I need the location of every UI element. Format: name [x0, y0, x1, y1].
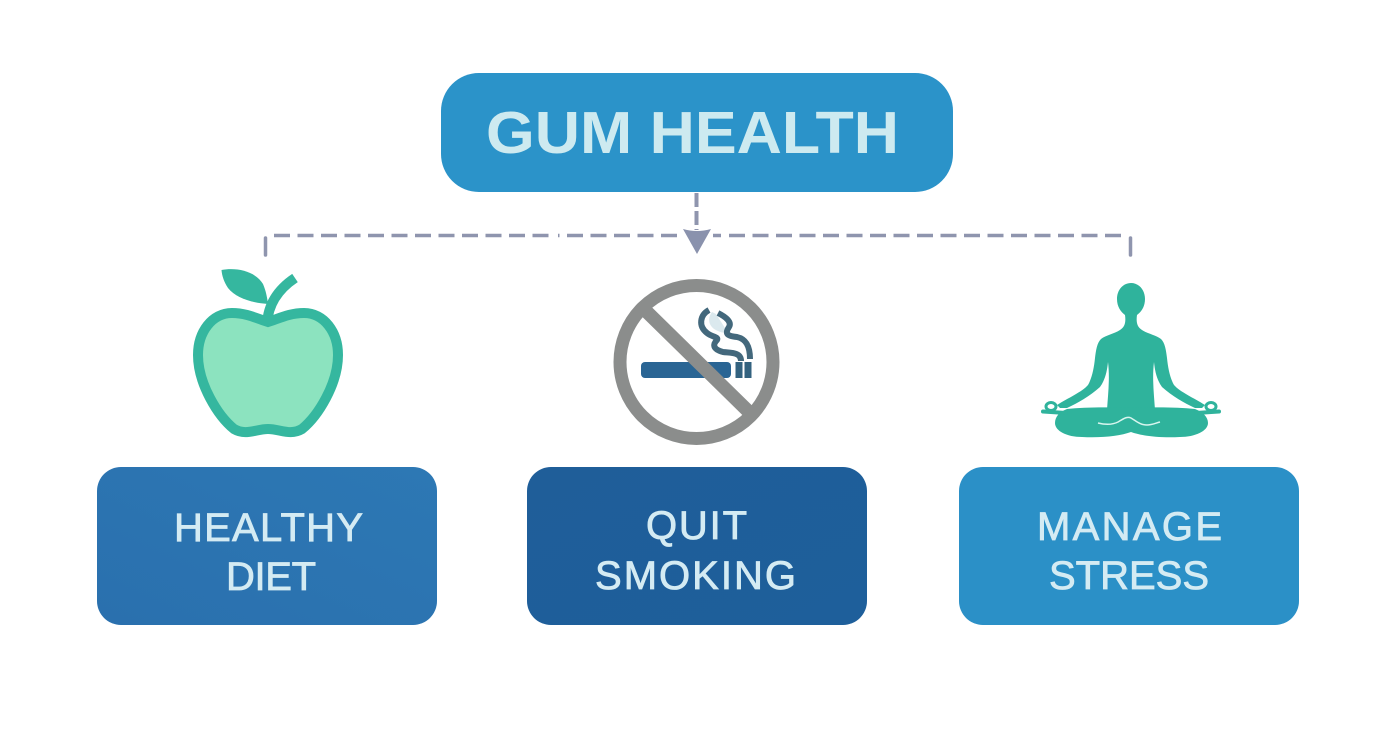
dashed connector	[266, 236, 1130, 255]
panel: healthy diet: DIET	[226, 555, 316, 599]
panel: quit smoking	[527, 467, 867, 625]
title: Gum Health	[441, 73, 953, 192]
icon: apple	[198, 269, 338, 432]
panel: healthy diet: HEALTHY	[174, 506, 363, 550]
icon: meditating figure	[1043, 283, 1219, 437]
smoke	[701, 310, 750, 361]
panel: healthy diet	[97, 467, 437, 625]
title: Gum Health: GUM HEALTH	[486, 100, 899, 166]
panel: manage stress	[959, 467, 1299, 625]
icon: no smoking	[620, 286, 773, 438]
panel: quit smoking: QUIT	[646, 504, 747, 548]
panel: manage stress: STRESS	[1049, 554, 1209, 598]
arrow: down to icons	[683, 193, 711, 254]
cigarette	[641, 362, 752, 378]
prohibition sign	[620, 286, 773, 438]
panel: manage stress: MANAGE	[1037, 505, 1222, 549]
panel: quit smoking: SMOKING	[595, 554, 796, 598]
